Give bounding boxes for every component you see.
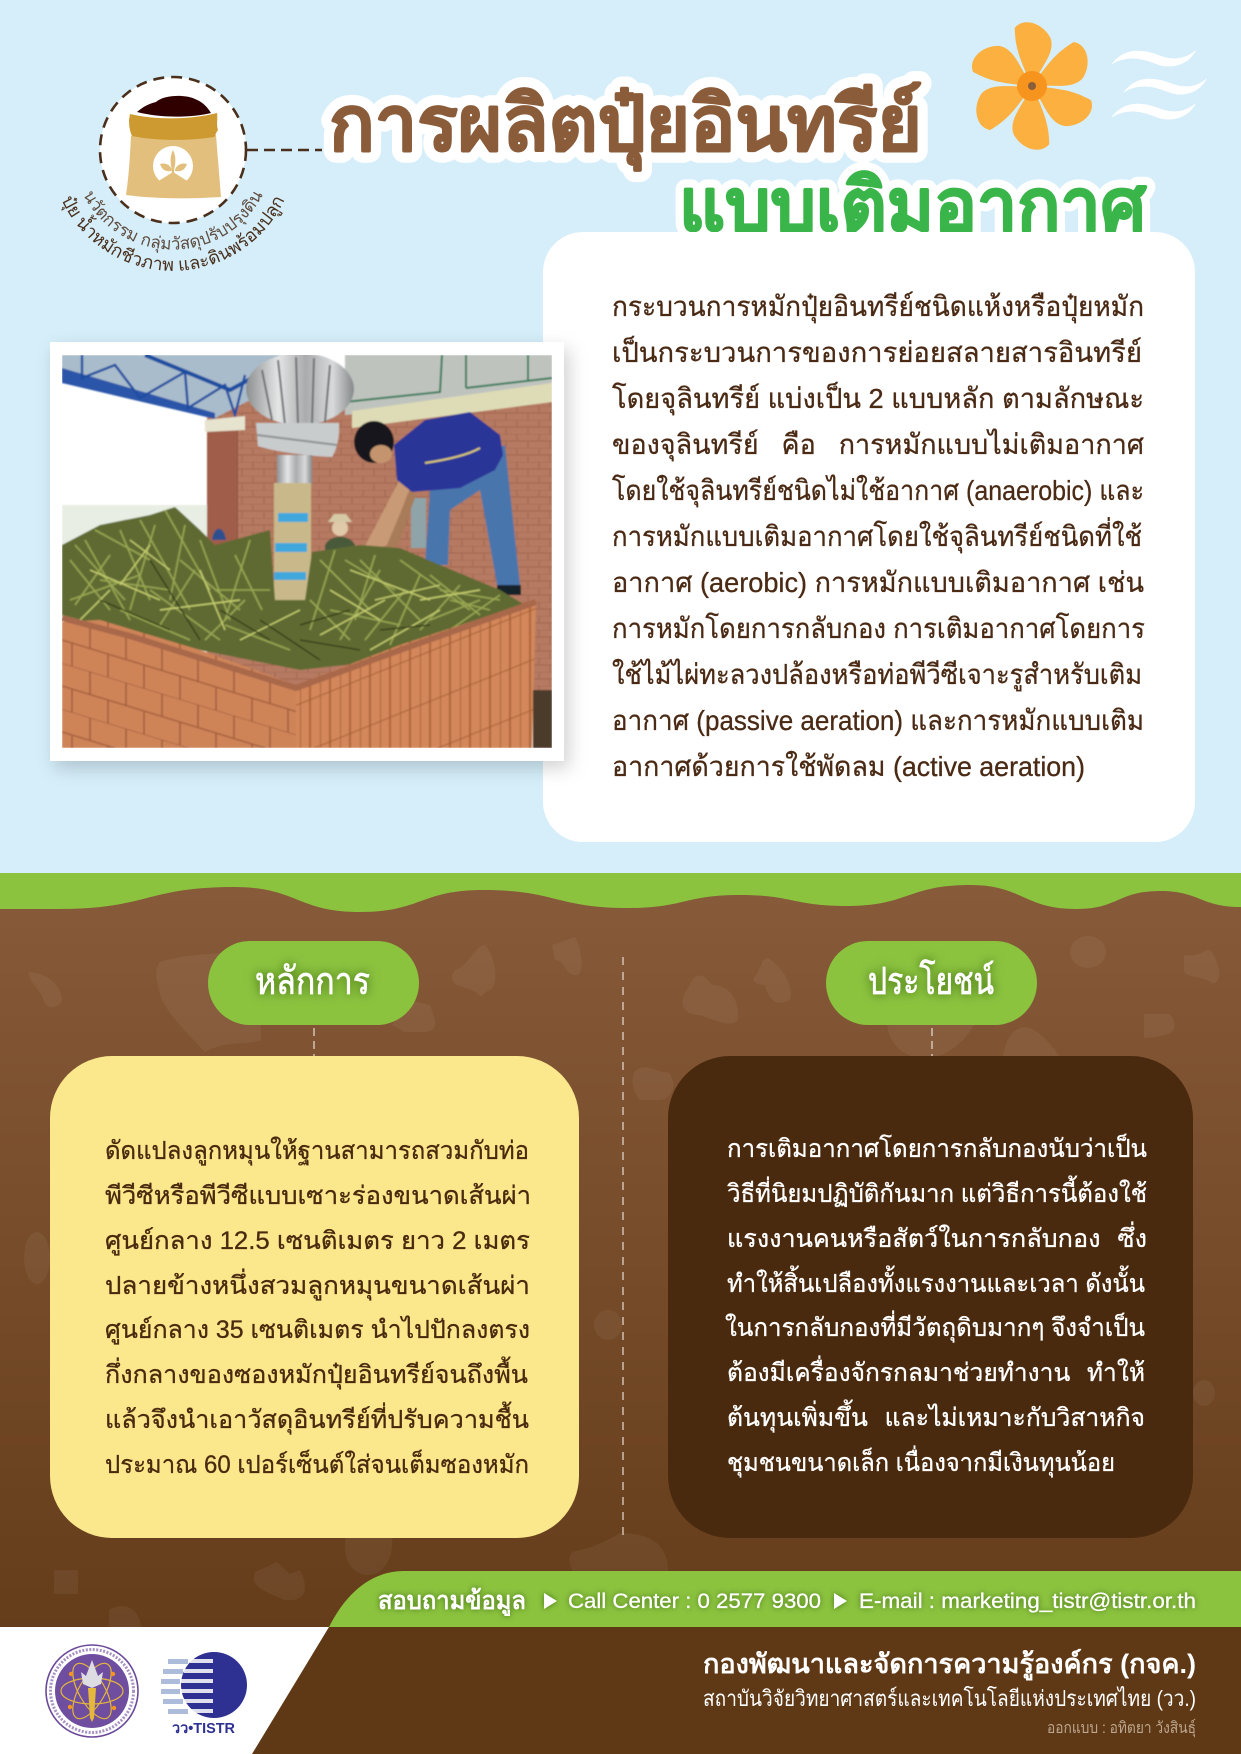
- pill heading: benefits: [826, 941, 1037, 1025]
- soil background: [0, 873, 1241, 1754]
- footer: dark brown area: [252, 1627, 1241, 1754]
- contact bar: สอบถามข้อมูล: [378, 1587, 526, 1617]
- badge: fertilizer bag with curved caption: [61, 76, 322, 271]
- intro paragraph: โดยใช้จุลินทรีย์ชนิดไม่ใช้อากาศ (anaerobic) และ: [612, 474, 1144, 508]
- dashed connector to title: [247, 149, 322, 151]
- contact bar: Call Center : 0 2577 9300: [568, 1590, 821, 1613]
- brick box right face: [296, 600, 536, 748]
- panel: introduction text: [543, 232, 1195, 842]
- icon: orange fan: [966, 19, 1098, 153]
- pill heading: benefits: ประโยชน์: [868, 959, 994, 1003]
- benefits text: ทำให้สิ้นเปลืองทั้งแรงงานและเวลา ดังนั้น: [727, 1265, 1145, 1298]
- pill heading: principle: หลักการ: [255, 961, 370, 1003]
- benefits text: วิธีที่นิยมปฏิบัติกันมาก แต่วิธีการนี้ต้องใช้: [727, 1175, 1147, 1208]
- corrugated wall top: [345, 355, 552, 415]
- dashed connector: benefits: [931, 1028, 933, 1056]
- title: [329, 82, 1147, 246]
- principle text: [105, 1136, 531, 1479]
- soil texture blobs: [24, 936, 1219, 1627]
- title: แบบเติมอากาศ: [679, 166, 1147, 246]
- far hazy foliage: [62, 505, 207, 545]
- curved caption: ปุ๋ย น้ำหมักชีวภาพ และดินพร้อมปลูก: [61, 196, 284, 271]
- panel: principle: [50, 1056, 579, 1538]
- panel: benefits: [668, 1056, 1193, 1538]
- arrow: [834, 1593, 847, 1609]
- brick box top edge: [62, 602, 536, 688]
- control box: [411, 498, 426, 548]
- logo: TISTR: [161, 1652, 247, 1737]
- principle text: ศูนย์กลาง 12.5 เซนติเมตร ยาว 2 เมตร: [105, 1227, 530, 1256]
- title: การผลิตปุ๋ยอินทรีย์: [329, 82, 922, 172]
- logo: TISTR: วว•TISTR: [172, 1720, 235, 1737]
- intro paragraph: การหมักโดยการกลับกอง การเติมอากาศโดยการ: [612, 612, 1145, 644]
- principle text: ปลายข้างหนึ่งสวมลูกหมุนขนาดเส้นผ่า: [105, 1268, 530, 1301]
- arrow: [544, 1593, 557, 1609]
- intro paragraph: โดยจุลินทรีย์ แบ่งเป็น 2 แบบหลัก ตามลักษณะ: [612, 381, 1144, 416]
- photo: turbine ventilator on compost pile: [50, 342, 564, 761]
- pill heading: principle: [208, 941, 419, 1025]
- principle text: ประมาณ 60 เปอร์เซ็นต์ใส่จนเต็มซองหมัก: [105, 1449, 529, 1479]
- intro paragraph: กระบวนการหมักปุ๋ยอินทรีย์ชนิดแห้งหรือปุ๋ยหมัก: [612, 291, 1144, 324]
- organisation text: ออกแบบ : อทิตยา วังสินธุ์: [1047, 1718, 1196, 1738]
- intro paragraph: อากาศ (aerobic) การหมักแบบเติมอากาศ เช่น: [612, 567, 1144, 598]
- benefits text: ต้นทุนเพิ่มขึ้น และไม่เหมาะกับวิสาหกิจ: [727, 1399, 1145, 1433]
- intro paragraph: เป็นกระบวนการของการย่อยสลายสารอินทรีย์: [612, 335, 1142, 368]
- icon: fertilizer sack: [126, 96, 221, 198]
- principle text: ดัดแปลงลูกหมุนให้ฐานสามารถสวมกับท่อ: [105, 1136, 529, 1166]
- curved caption: นวัตกรรม กลุ่มวัสดุปรับปรุงดิน: [84, 191, 262, 253]
- person shirt: [394, 412, 503, 492]
- intro paragraph: อากาศด้วยการใช้พัดลม (active aeration): [612, 750, 1085, 782]
- far pillar: [206, 430, 237, 545]
- workers in background: [332, 520, 348, 536]
- ventilator head: [246, 353, 354, 425]
- back wall: [207, 400, 552, 700]
- title: การผลิตปุ๋ยอินทรีย์: [329, 82, 922, 172]
- benefits text: แรงงานคนหรือสัตว์ในการกลับกอง ซึ่ง: [727, 1221, 1147, 1253]
- organisation text: [703, 1648, 1196, 1738]
- principle text: ศูนย์กลาง 35 เซนติเมตร นำไปปักลงตรง: [105, 1315, 530, 1345]
- dashed connector: principle: [313, 1028, 315, 1056]
- benefits text: การเติมอากาศโดยการกลับกองนับว่าเป็น: [727, 1133, 1147, 1163]
- centre dashed divider: [622, 957, 624, 1537]
- intro paragraph: ใช้ไม้ไผ่ทะลวงปล้องหรือท่อพีวีซีเจาะรูสำหรับเติม: [612, 658, 1142, 692]
- person head: [354, 421, 394, 463]
- intro paragraph: การหมักแบบเติมอากาศโดยใช้จุลินทรีย์ชนิดที่ใช้: [612, 517, 1142, 554]
- logo: ministry seal: [46, 1645, 138, 1737]
- intro paragraph: อากาศ (passive aeration) และการหมักแบบเติม: [612, 705, 1144, 736]
- contact bar: [329, 1571, 1241, 1627]
- PVC pipe: [274, 483, 311, 617]
- intro paragraph: ของจุลินทรีย์ คือ การหมักแบบไม่เติมอากาศ: [612, 429, 1144, 462]
- principle text: พีวีซีหรือพีวีซีแบบเซาะร่องขนาดเส้นผ่า: [105, 1182, 531, 1210]
- person legs: [425, 445, 520, 590]
- brick box left face: [62, 620, 296, 748]
- intro paragraph: [612, 291, 1145, 782]
- benefits text: ชุมชนขนาดเล็ก เนื่องจากมีเงินทุนน้อย: [727, 1445, 1115, 1478]
- principle text: แล้วจึงนำเอาวัสดุอินทรีย์ที่ปรับความชื้น: [105, 1401, 529, 1435]
- badge circle: [100, 77, 246, 223]
- footer: white logo area: [0, 1627, 340, 1754]
- person arms: [366, 481, 410, 548]
- benefits text: ในการกลับกองที่มีวัตถุดิบมากๆ จึงจำเป็น: [725, 1310, 1145, 1343]
- benefits text: [725, 1133, 1147, 1478]
- grass band: [0, 873, 1241, 912]
- compost grass pile: [62, 507, 525, 670]
- organisation text: กองพัฒนาและจัดการความรู้องค์กร (กจค.): [703, 1648, 1196, 1681]
- benefits text: ต้องมีเครื่องจักรกลมาช่วยทำงาน ทำให้: [727, 1355, 1145, 1387]
- principle text: กึ่งกลางของซองหมักปุ๋ยอินทรีย์จนถึงพื้น: [105, 1356, 528, 1390]
- title: แบบเติมอากาศ: [679, 166, 1147, 246]
- contact bar: E-mail : marketing_tistr@tistr.or.th: [859, 1590, 1196, 1613]
- sky background: [0, 0, 1241, 880]
- icon: wind lines: [1111, 50, 1207, 119]
- roof: [62, 355, 290, 418]
